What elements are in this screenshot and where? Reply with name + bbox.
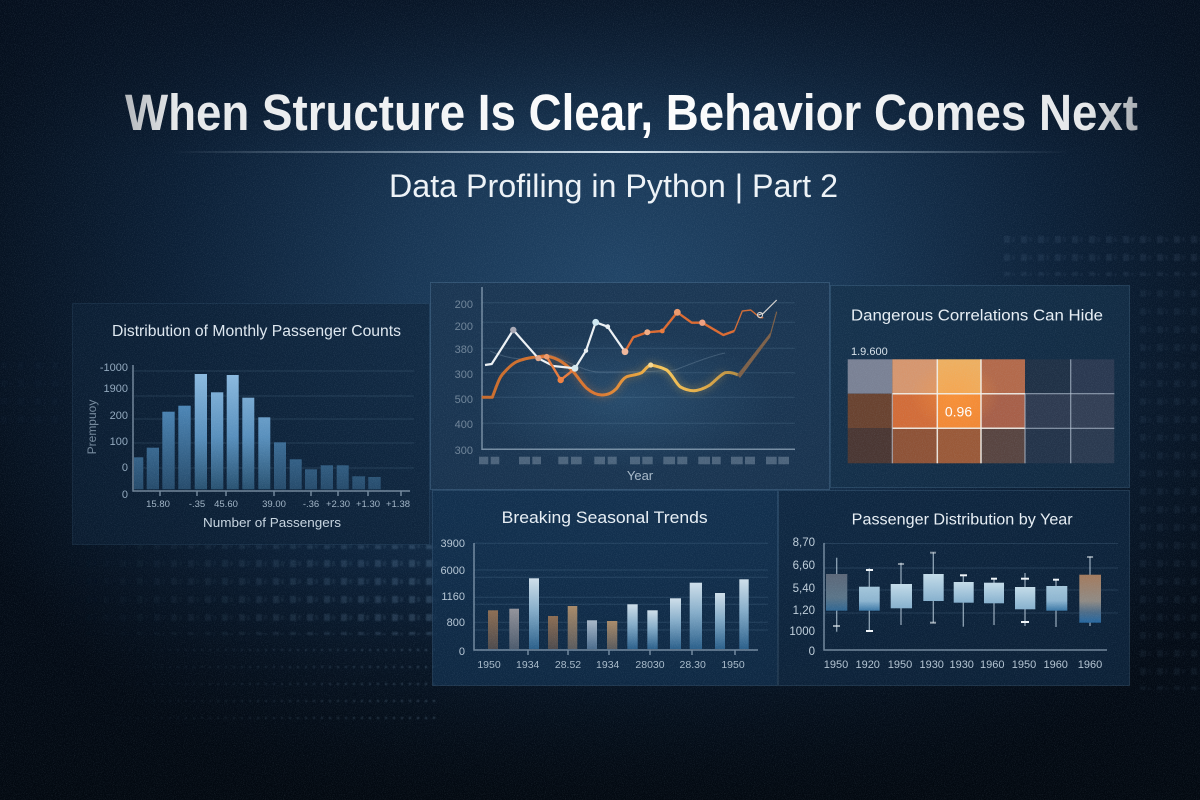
histogram x ticks (146, 499, 410, 510)
x tick blocks (479, 457, 789, 464)
histogram y label: Prempuoy (85, 400, 99, 454)
histogram y ticks: 200 (110, 410, 128, 422)
box plot x ticks (824, 659, 1102, 671)
box plot y ticks: 0 (809, 646, 815, 658)
line chart y ticks: 500 (455, 394, 473, 406)
box plot boxes (826, 574, 1101, 623)
histogram x ticks: +1.38 (386, 499, 410, 510)
seasonal x ticks: 1934 (596, 659, 620, 671)
box plot x ticks: 1920 (855, 659, 880, 671)
heatmap grid lines (892, 359, 1114, 463)
seasonal x ticks: 1950 (721, 659, 745, 671)
panel: line chart (430, 282, 830, 490)
box plot x ticks: 1950 (1012, 659, 1036, 671)
histogram y ticks: -1000 (100, 362, 128, 374)
seasonal bars (488, 578, 749, 649)
histogram y ticks: 1900 (104, 383, 128, 395)
histogram axes (133, 365, 410, 496)
histogram y ticks: 0 (122, 462, 128, 474)
box plot x ticks: 1960 (1078, 659, 1102, 671)
white tail (758, 300, 777, 315)
box plot x ticks: 1960 (980, 659, 1005, 671)
heatmap title: Dangerous Correlations Can Hide (851, 308, 1103, 325)
seasonal x ticks: 28.30 (680, 659, 706, 671)
histogram x ticks: -.36 (303, 499, 319, 510)
line chart y ticks (455, 299, 473, 457)
thin orange tail (734, 310, 763, 331)
histogram x ticks: 45.60 (214, 499, 238, 510)
seasonal x ticks: 1934 (516, 659, 540, 671)
orange dip line (538, 357, 573, 380)
box plot whiskers (837, 552, 1090, 632)
background data dot matrix (170, 236, 1197, 720)
seasonal grid (474, 543, 768, 630)
heatmap top label: 1.9.600 (851, 346, 888, 358)
seasonal y ticks: 1160 (441, 591, 465, 603)
histogram y ticks: 0 (122, 489, 128, 501)
seasonal x ticks: 28.52 (555, 659, 581, 671)
title divider (170, 151, 1070, 153)
panel: seasonal trend bars (432, 490, 778, 686)
lower orange-yellow line (482, 356, 738, 397)
box plot x ticks: 1950 (888, 659, 912, 671)
histogram title: Distribution of Monthly Passenger Counts (112, 323, 401, 340)
panel: correlation heatmap (830, 286, 1130, 488)
seasonal y ticks: 0 (459, 646, 465, 658)
subtitle: Data Profiling in Python | Part 2 (389, 168, 838, 204)
histogram x ticks: +2.30 (326, 499, 350, 510)
faint reference curve (490, 351, 725, 372)
thin tail (770, 312, 777, 336)
box plot x ticks: 1960 (1043, 659, 1068, 671)
panel: box plots (778, 490, 1130, 686)
panel: histogram (72, 304, 430, 544)
seasonal y ticks (441, 538, 465, 658)
box plot title: Passenger Distribution by Year (852, 511, 1073, 528)
seasonal x ticks: 28030 (635, 659, 665, 671)
line chart grid (482, 303, 795, 423)
x axis label: Year (627, 468, 654, 483)
box plot y ticks: 1000 (789, 626, 815, 638)
line chart y ticks: 200 (455, 321, 473, 333)
box plot x ticks: 1930 (919, 659, 944, 671)
histogram grid (134, 371, 414, 468)
seasonal y ticks: 6000 (441, 565, 465, 577)
histogram x ticks: -.35 (189, 499, 205, 510)
box plot y ticks: 5,40 (793, 583, 815, 595)
line chart y ticks: 380 (455, 344, 473, 356)
seasonal title: Breaking Seasonal Trends (502, 509, 708, 527)
histogram y ticks: 100 (110, 436, 128, 448)
box plot x ticks: 1950 (824, 659, 848, 671)
box plot caps (833, 553, 1093, 631)
line chart y ticks: 200 (455, 299, 473, 311)
box plot axes (824, 543, 1107, 650)
line chart y ticks: 300 (455, 369, 473, 381)
orange upper line (625, 312, 734, 352)
line chart axes (482, 287, 795, 449)
seasonal y ticks: 800 (447, 617, 465, 629)
seasonal y ticks: 3900 (441, 538, 465, 550)
box plot grid (824, 544, 1118, 613)
histogram x ticks: +1.30 (356, 499, 380, 510)
white line (485, 322, 625, 368)
seasonal x ticks (477, 659, 745, 671)
histogram x ticks: 39.00 (262, 499, 286, 510)
box plot y ticks: 1,20 (793, 605, 815, 617)
seasonal axes (474, 543, 758, 655)
data point markers (510, 309, 763, 383)
highlighted correlation value: 0.96 (945, 404, 972, 420)
curve glow (543, 356, 725, 395)
histogram y ticks (100, 362, 128, 501)
box plot y ticks (789, 537, 815, 658)
line chart y ticks: 400 (455, 419, 473, 431)
histogram x ticks: 15.80 (146, 499, 170, 510)
seasonal x ticks: 1950 (477, 659, 501, 671)
box plot y ticks: 8,70 (793, 537, 815, 549)
histogram x label: Number of Passengers (203, 515, 342, 530)
histogram bars (134, 374, 381, 489)
box plot x ticks: 1930 (949, 659, 974, 671)
brown tail (737, 333, 770, 378)
heatmap cells (848, 359, 1114, 463)
box plot y ticks: 6,60 (793, 560, 815, 572)
line chart y ticks: 300 (455, 445, 473, 457)
